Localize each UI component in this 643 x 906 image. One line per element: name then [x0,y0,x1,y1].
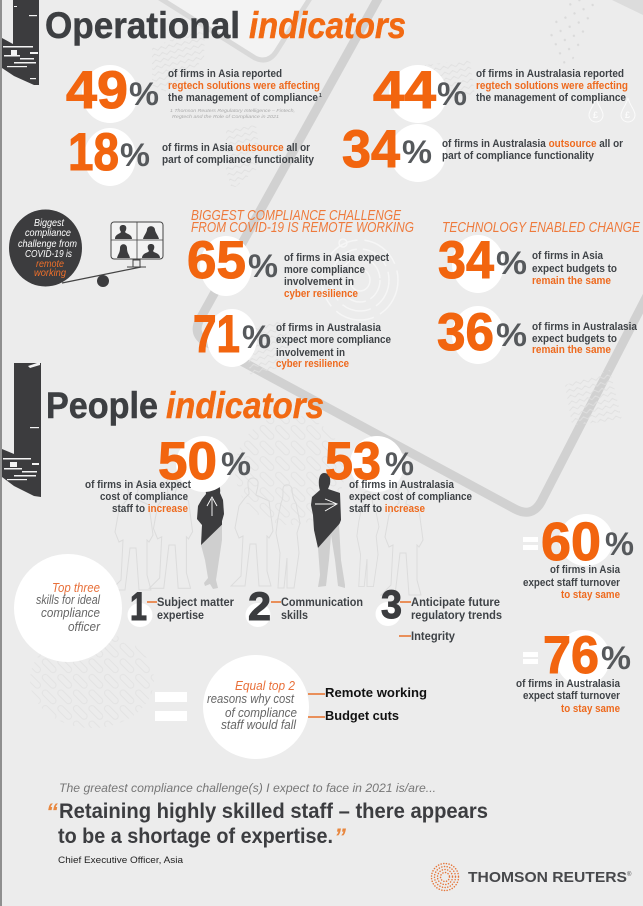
heading: biggest compliance challenge: FROM COVID-19 IS REMOTE WORKING [191,220,414,236]
stat: 18% Asia outsource: part of compliance functionality [162,154,314,166]
logo: thomson reuters: ® [627,871,632,878]
quote [46,781,488,866]
callout: top three skills: Top three [52,581,100,595]
stat: 71% Australasia cyber resilience: expect more compliance [276,334,391,346]
list: reasons: Budget cuts [325,708,399,723]
logo: thomson reuters: THOMSON REUTERS [468,869,627,886]
title: people indicators [46,385,324,426]
skill 3: 3 [381,583,402,627]
stat: 49% Asia regtech [66,61,322,123]
banner: people [2,362,41,497]
icon: pound drops: £ [625,110,630,120]
stat: 44% Australasia regtech: % [437,76,467,112]
stat: 18% Asia outsource: 18 [68,123,119,182]
stat: 60% Asia turnover: % [605,526,634,562]
stat: 49% Asia regtech: of firms in Asia reported [168,68,282,80]
stat: 76% Australasia turnover: expect staff turnover [523,690,620,702]
quote: ” [334,824,346,851]
stat: 36% Australasia budgets [437,303,637,364]
quote: “ [46,799,58,826]
heading: biggest compliance challenge: BIGGEST COMPLIANCE CHALLENGE [191,208,401,224]
stat: 60% Asia turnover: of firms in Asia [550,564,620,576]
callout: top three skills: officer [68,620,101,634]
stat: 44% Australasia regtech: regtech solutions were affecting [476,80,628,92]
skill 1 [128,585,234,629]
quote: to be a shortage of expertise. [58,825,333,848]
stat: 34% Australasia outsource: 34 [342,120,401,179]
stat: 71% Australasia cyber resilience: involvement in [276,347,345,359]
stat: 76% Australasia turnover: % [601,640,631,676]
icon: large equals sign [155,692,187,721]
stat: 65% Asia cyber resilience: cyber resilience [284,288,358,300]
stat: 34% Asia budgets: % [496,245,527,281]
stat: 50% Asia staff cost: of firms in Asia expect [85,479,191,491]
stat: 65% Asia cyber resilience: % [248,248,278,284]
skill 1: Subject matter [157,595,234,609]
logo: thomson reuters [432,864,632,890]
stat: 49% Asia regtech: the management of compliance [168,92,318,104]
quote: Chief Executive Officer, Asia [58,855,184,866]
stat: 53% Australasia staff cost: % [385,446,414,482]
stat: 49% Asia regtech: 1 [319,93,322,99]
stat: 50% Asia staff cost: % [221,446,251,482]
callout: top three skills: compliance [41,606,100,620]
callout: biggest challenge bubble: challenge from [18,238,77,250]
skill 2: 2 [248,585,271,629]
callout: top three skills: skills for ideal [36,593,101,607]
stat: 71% Australasia cyber resilience: 71 [193,305,240,364]
icon: pound drops [589,98,635,122]
callout: biggest challenge bubble: COVID-19 is [25,248,73,260]
stat: 50% Asia staff cost: cost of compliance [100,491,188,503]
skill 1: 1 [130,585,147,629]
stat: 36% Australasia budgets: 36 [437,303,494,362]
footnote: Regtech and the Role of Compliance in 2021 [172,114,280,119]
stat: 34% Asia budgets: of firms in Asia [532,250,603,262]
stat: 44% Australasia regtech: the management of compliance [476,92,626,104]
callout: equal top 2 reasons: Equal top 2 [235,679,295,693]
skill 3: Integrity [411,629,455,643]
stat: 76% Australasia turnover: of firms in Australasia [516,678,620,690]
stat: 44% Australasia regtech: 44 [373,61,437,120]
heading: biggest compliance challenge [191,208,414,236]
stat: 53% Australasia staff cost: of firms in Australasia [349,479,454,491]
callout: biggest challenge bubble: compliance [25,227,71,239]
stat: 50% Asia staff cost: 50 [158,432,217,491]
list: reasons: Remote working [325,685,427,700]
stat: 18% Asia outsource: of firms in Asia outsource all or [162,142,310,154]
stat: 36% Australasia budgets: of firms in Australasia [532,321,637,333]
stat: 53% Australasia staff cost [325,432,472,515]
title: operational indicators: indicators [249,5,406,46]
stat: 65% Asia cyber resilience: more compliance [284,264,365,276]
quote: Retaining highly skilled staff – there appears [59,800,488,823]
callout: biggest challenge bubble: remote [36,258,64,270]
stat: 60% Asia turnover: to stay same [561,589,620,601]
stat: 36% Australasia budgets: expect budgets to [532,333,617,345]
footnote: 1 Thomson Reuters Regulatory Intelligence – Fintech, [170,108,295,113]
stat: 36% Australasia budgets: remain the same [532,344,611,356]
stat: 18% Asia outsource: % [120,137,150,173]
stat: 76% Australasia turnover: to stay same [561,703,620,715]
stat: 71% Australasia cyber resilience [193,305,391,370]
stat: 76% Australasia turnover [516,626,631,715]
stat: 71% Australasia cyber resilience: of firms in Australasia [276,322,381,334]
title: operational indicators [45,5,406,46]
skill 2 [246,585,363,629]
stat: 34% Asia budgets: 34 [438,231,494,290]
stat: 50% Asia staff cost: staff to increase [112,503,188,515]
banner: operational [2,0,39,85]
stat: 53% Australasia staff cost: 53 [325,432,381,491]
stat: 50% Asia staff cost [85,432,251,515]
callout: biggest challenge bubble [9,210,82,286]
stat: 49% Asia regtech: % [129,76,159,112]
callout: equal top 2 reasons: staff would fall [221,718,297,732]
stat: 34% Australasia outsource: of firms in Australasia outsource all or [442,138,623,150]
stat: 71% Australasia cyber resilience: % [242,319,271,355]
callout: equal top 2 reasons [203,655,309,759]
skill 1: expertise [157,608,204,622]
stat: 76% Australasia turnover: 76 [543,626,599,685]
footnote [170,108,295,119]
background tablet shapes [150,0,643,512]
callout: biggest challenge bubble: working [34,267,66,279]
stat: 49% Asia regtech: 49 [66,61,128,120]
callout: biggest challenge bubble: Biggest [34,217,65,229]
stat: 65% Asia cyber resilience: of firms in Asia expect [284,252,389,264]
stat: 34% Asia budgets: expect budgets to [532,263,617,275]
background textures [30,0,622,728]
stat: 53% Australasia staff cost: expect cost of compliance [349,491,472,503]
callout: top three skills [14,554,122,662]
skill 3 [376,583,502,643]
skill 2: Communication [281,595,363,609]
stat: 60% Asia turnover: 60 [541,512,601,572]
skill 3: regulatory trends [411,608,502,622]
figure: woman with up arrow [197,482,224,589]
illustration: group of people [111,473,423,595]
stat: 60% Asia turnover [523,512,634,601]
title: operational indicators: Operational [45,5,240,46]
stat: 65% Asia cyber resilience [187,231,389,300]
stat: 65% Asia cyber resilience: involvement in [284,276,354,288]
list: reasons [308,685,427,723]
stat: 65% Asia cyber resilience: 65 [187,231,246,290]
stat: 44% Australasia regtech: of firms in Australasia reported [476,68,624,80]
stat: 34% Australasia outsource [342,120,623,182]
stat: 34% Asia budgets: remain the same [532,275,611,287]
callout: equal top 2 reasons: of compliance [225,706,297,720]
stat: 36% Australasia budgets: % [496,317,527,353]
callout: equal top 2 reasons: reasons why cost [207,692,294,706]
stat: 71% Australasia cyber resilience: cyber resilience [276,358,349,370]
stat: 18% Asia outsource [68,123,314,186]
stat: 44% Australasia regtech [373,61,628,123]
stat: 49% Asia regtech: regtech solutions were affecting [168,80,320,92]
stat: 34% Australasia outsource: part of compliance functionality [442,150,594,162]
skill 3: Anticipate future [411,595,500,609]
stat: 53% Australasia staff cost: staff to increase [349,503,425,515]
stat: 60% Asia turnover: expect staff turnover [523,577,620,589]
icon: video call monitor on seesaw [62,222,163,287]
figure: man with right arrow [311,473,345,588]
stat: 34% Australasia outsource: % [402,134,432,170]
skill 2: skills [281,608,308,622]
title: people indicators: People [46,385,158,426]
stat: 34% Asia budgets [438,231,617,293]
icon: pound drops: £ [593,110,598,120]
quote: The greatest compliance challenge(s) I expect to face in 2021 is/are... [59,781,436,795]
title: people indicators: indicators [166,385,324,426]
